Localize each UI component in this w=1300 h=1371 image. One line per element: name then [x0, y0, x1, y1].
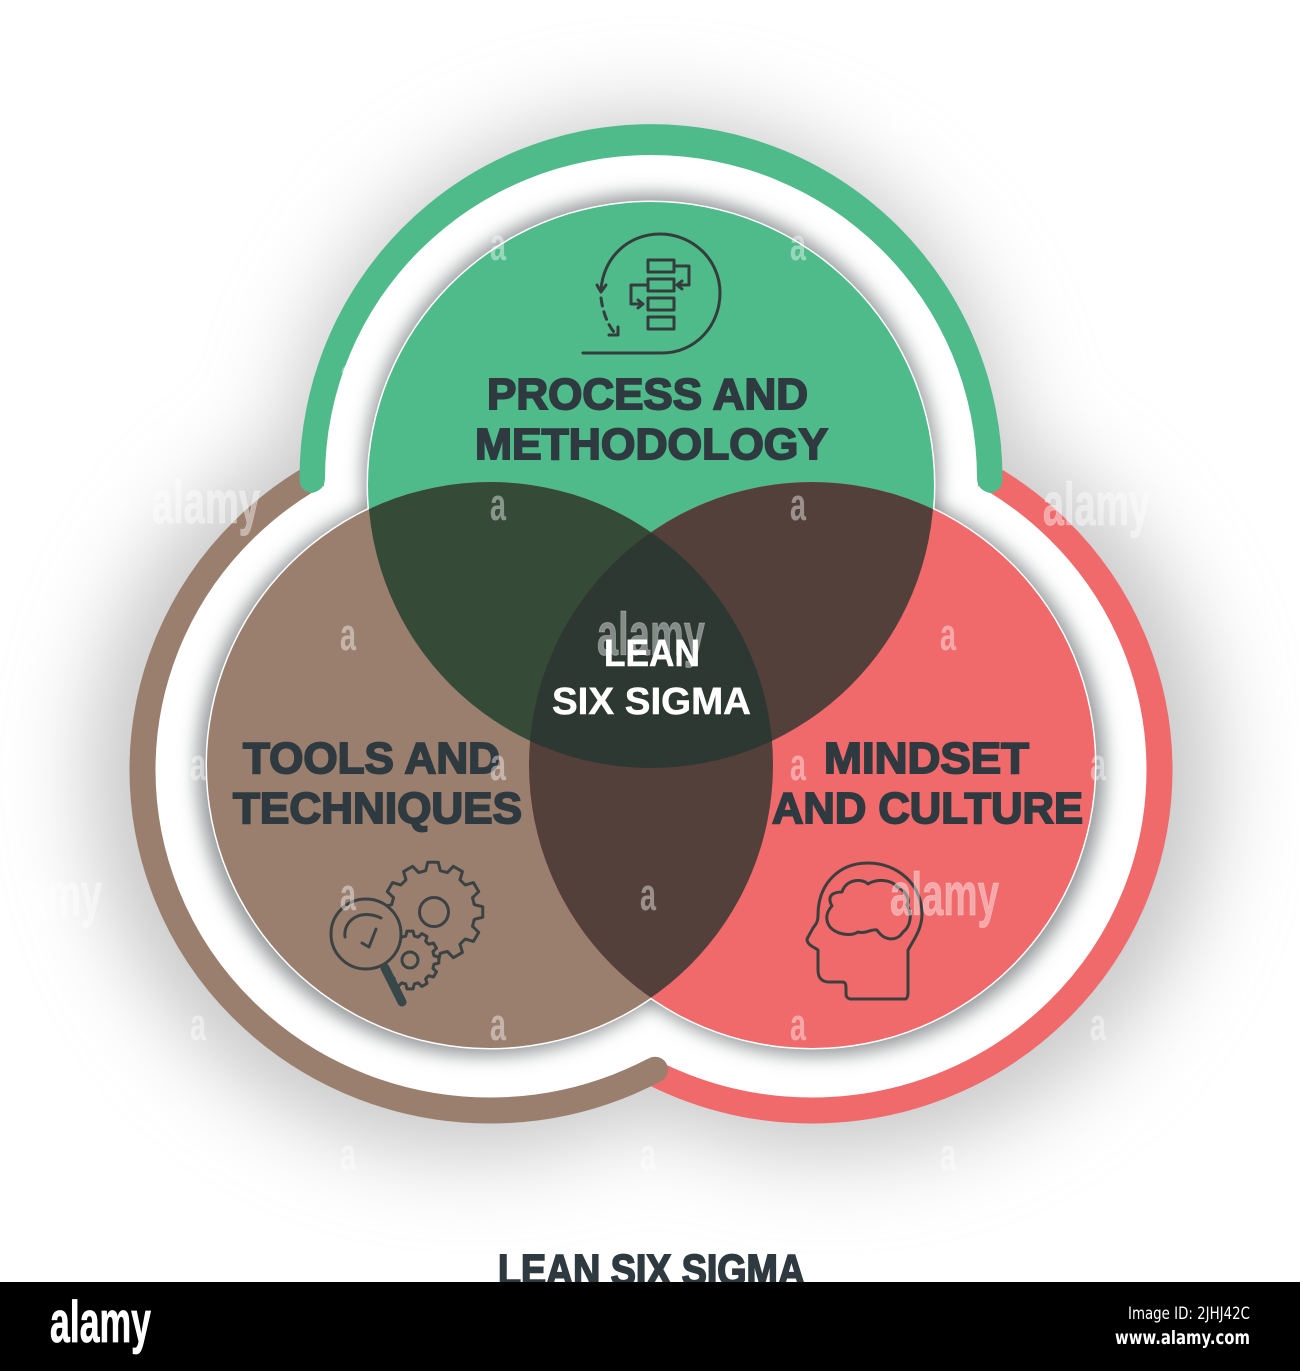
- heading: process and methodology: METHODOLOGY: [475, 420, 828, 469]
- website: www.alamy.com: [1115, 1327, 1250, 1349]
- center label: [552, 633, 751, 723]
- outer ring: green: [300, 124, 1002, 493]
- watermarks: a: [340, 869, 357, 920]
- heading: mindset and culture: MINDSET: [824, 734, 1029, 783]
- watermarks: [0, 76, 1150, 1180]
- overlap: green and brown: [369, 482, 651, 741]
- watermarks: a: [490, 479, 507, 530]
- watermarks: a: [640, 1129, 657, 1180]
- watermarks: a: [190, 739, 207, 790]
- watermarks: a: [940, 1129, 957, 1180]
- watermarks: a: [490, 999, 507, 1050]
- icon: head with brain: [807, 863, 922, 999]
- heading: process and methodology: PROCESS AND: [487, 370, 808, 419]
- watermarks: a: [790, 219, 807, 270]
- heading: tools and techniques: [233, 734, 522, 833]
- heading: mindset and culture: [772, 734, 1083, 833]
- watermarks: alamy: [597, 601, 705, 668]
- heading: process and methodology: [475, 370, 828, 469]
- watermarks: a: [790, 739, 807, 790]
- outer ring: brown: [130, 470, 668, 1124]
- circle: process and methodology: [368, 202, 934, 768]
- heading: mindset and culture: AND CULTURE: [772, 784, 1083, 833]
- icon: gears and magnifier: [331, 862, 483, 1002]
- circle: mindset and culture: [529, 482, 1095, 1048]
- soft drop shadow behind diagram: [90, 115, 1215, 1155]
- bottom title: LEAN SIX SIGMA: [498, 1246, 805, 1295]
- stock photo bar: [0, 1282, 1300, 1371]
- outer ring: red: [651, 470, 1172, 1124]
- watermarks: a: [790, 479, 807, 530]
- icon: process flow: [583, 234, 720, 353]
- watermarks: a: [940, 609, 957, 660]
- heading: tools and techniques: TECHNIQUES: [233, 784, 522, 833]
- watermarks: a: [340, 609, 357, 660]
- overlap: center: [530, 532, 772, 768]
- watermarks: a: [490, 219, 507, 270]
- watermarks: a: [640, 869, 657, 920]
- circle edges: [206, 200, 1096, 1050]
- watermarks: a: [490, 739, 507, 790]
- venn diagram: [206, 200, 1096, 1050]
- overlap: brown and red: [529, 741, 773, 998]
- watermarks: a: [940, 349, 957, 400]
- image id: Image ID: 2JHJ42C: [1128, 1304, 1250, 1324]
- watermarks: a: [1090, 739, 1107, 790]
- watermarks: alamy: [890, 861, 999, 928]
- logo: alamy: [50, 1290, 151, 1355]
- watermarks: alamy: [1043, 471, 1150, 538]
- heading: tools and techniques: TOOLS AND: [243, 734, 500, 783]
- overlap: green and red: [651, 482, 933, 741]
- watermarks: a: [340, 349, 357, 400]
- inner shadows around circles: [197, 194, 1105, 1056]
- watermarks: a: [340, 1129, 357, 1180]
- circle: tools and techniques: [207, 482, 773, 1048]
- center label: LEAN: [604, 633, 700, 675]
- watermarks: a: [1090, 999, 1107, 1050]
- watermarks: alamy: [890, 76, 998, 143]
- watermarks: a: [190, 999, 207, 1050]
- white base under the rings: [154, 153, 1148, 1099]
- watermarks: alamy: [152, 469, 260, 536]
- center label: SIX SIGMA: [552, 681, 751, 723]
- watermarks: a: [790, 999, 807, 1050]
